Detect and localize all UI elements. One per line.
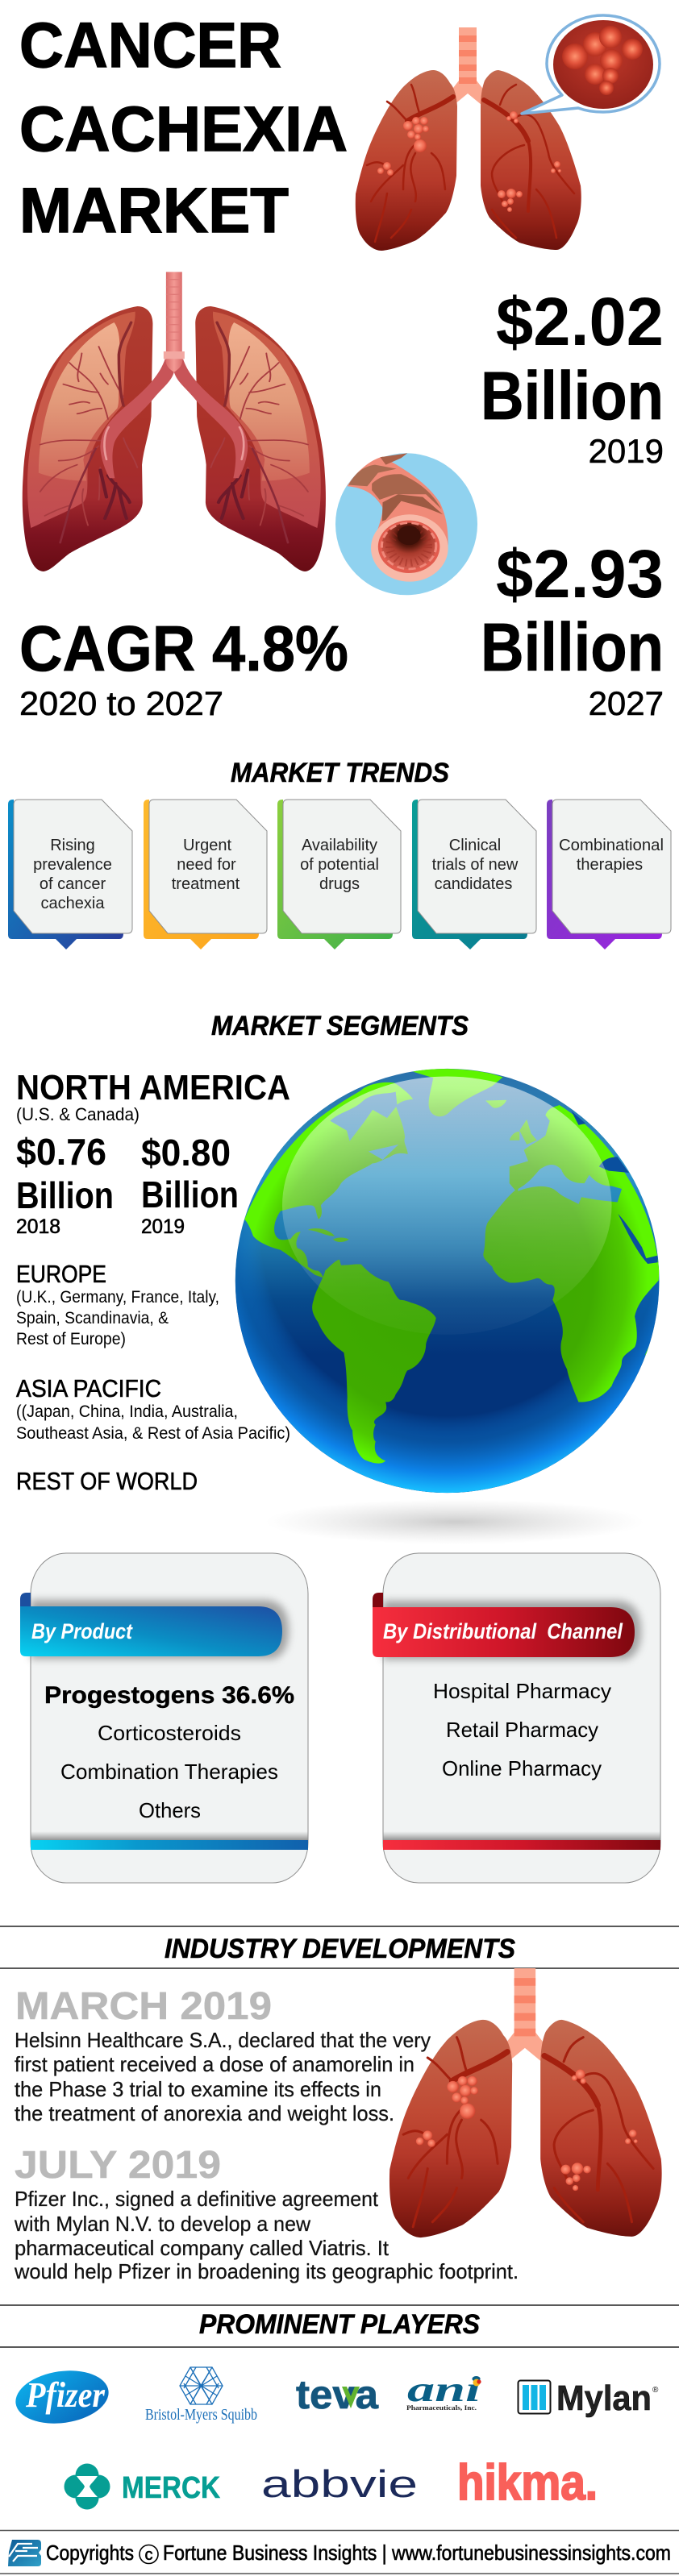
stat: 2019 market size (481, 284, 664, 470)
panel: by distributional channel: Online Pharmacy (442, 1756, 602, 1780)
text block: March 2019 (15, 1985, 431, 2125)
icon: healthy lungs (23, 272, 326, 571)
text block: March 2019: MARCH 2019 (15, 1985, 272, 2028)
stat: 2019 market size: $2.02 (496, 284, 664, 359)
stat: CAGR (19, 613, 348, 722)
stat: 2019 value: Billion (141, 1174, 239, 1215)
stat: 2019 value: $0.80 (141, 1132, 231, 1174)
stat: 2019 value: 2019 (141, 1215, 185, 1238)
stat: 2018 value: Billion (16, 1174, 114, 1216)
ribbon: by distributional channel: By Distributional Channel (383, 1619, 623, 1643)
text block: July 2019: would help Pfizer in broadening its geographic footprint. (14, 2259, 519, 2283)
card: availability: drugs (319, 875, 360, 893)
text block: March 2019: Helsinn Healthcare S.A., declared that the very (15, 2028, 431, 2052)
panel: by distributional channel (373, 1553, 660, 1883)
logo: Merck: MERCK (122, 2471, 220, 2505)
heading: market segments: MARKET SEGMENTS (211, 1011, 469, 1041)
logo: Pfizer (12, 2365, 112, 2429)
logo: Mylan: Mylan (556, 2379, 652, 2418)
panel: by product: Combination Therapies (60, 1760, 278, 1784)
text: Europe: (U.K., Germany, France, Italy, (16, 1288, 219, 1307)
stat: CAGR: 2020 to 2027 (19, 684, 223, 722)
heading: prominent players: PROMINENT PLAYERS (199, 2309, 480, 2340)
panel: market trends cards (8, 800, 671, 949)
heading: market trends: MARKET TRENDS (231, 758, 449, 788)
text: North America (16, 1068, 290, 1238)
logo: Bristol-Myers Squibb: Bristol-Myers Squibb (145, 2406, 257, 2424)
card: clinical trials (412, 800, 536, 949)
icon: Fortune Business Insights (8, 2540, 41, 2566)
text: Europe: Spain, Scandinavia, & (16, 1309, 169, 1327)
stat: 2018 value: 2018 (16, 1215, 60, 1238)
stat: 2019 market size: 2019 (589, 432, 664, 470)
logo: ani: ani (407, 2370, 481, 2409)
text: Asia Pacific: ASIA PACIFIC (16, 1374, 161, 1402)
panel: by distributional channel: Retail Pharmacy (446, 1718, 598, 1742)
icon: airway cross-section (335, 453, 477, 595)
panel: by product: Progestogens 36.6% (44, 1682, 294, 1709)
card: clinical trials: candidates (435, 875, 512, 893)
stat: 2027 market size: 2027 (589, 684, 664, 722)
card: rising prevalence: cachexia (41, 895, 105, 912)
callout: tumour close-up bubble (522, 15, 660, 114)
card: combinational therapies (547, 800, 671, 949)
stat: 2018 value (16, 1131, 114, 1238)
stat: 2027 market size (481, 536, 664, 722)
text block: March 2019: the treatment of anorexia and weight loss. (15, 2101, 394, 2125)
logo: Merck (65, 2463, 220, 2510)
panel: by product: Others (139, 1798, 201, 1822)
card: urgent need: Urgent (183, 837, 231, 854)
footer: copyright: Copyrights (46, 2541, 134, 2565)
logo: Bristol-Myers Squibb (145, 2367, 257, 2424)
icon: lungs with tumours (356, 27, 581, 251)
footer: copyright (8, 2540, 671, 2566)
stat: 2018 value: $0.76 (16, 1131, 106, 1173)
card: clinical trials: Clinical (449, 837, 501, 854)
title: CANCER (19, 9, 281, 81)
text: Asia Pacific: ((Japan, China, India, Australia, (16, 1402, 238, 1421)
logo: AbbVie: abbvie (261, 2462, 418, 2505)
card: urgent need (144, 800, 267, 949)
card: combinational therapies: therapies (577, 856, 643, 874)
card: rising prevalence: Rising (50, 837, 95, 854)
stat: CAGR: CAGR 4.8% (19, 613, 348, 684)
shadow under globe (265, 1499, 644, 1544)
logo: Mylan: ® (652, 2386, 659, 2395)
stat: 2019 value (141, 1132, 239, 1238)
title (19, 9, 348, 246)
card: availability: of potential (300, 856, 379, 874)
card: rising prevalence: prevalence (33, 856, 112, 874)
logo: teva: teva (296, 2372, 379, 2417)
panel: by distributional channel: Hospital Pharmacy (433, 1679, 611, 1703)
text: Asia Pacific (16, 1374, 290, 1443)
text: Europe (16, 1260, 219, 1348)
card: availability: Availability (302, 837, 377, 854)
icon: globe (235, 1069, 659, 1493)
title: CACHEXIA (19, 93, 348, 164)
text: Europe: Rest of Europe) (16, 1330, 126, 1348)
text block: March 2019: the Phase 3 trial to examine its effects in (15, 2077, 381, 2101)
text: Rest of World: REST OF WORLD (16, 1467, 198, 1495)
text: Asia Pacific: Southeast Asia, & Rest of Asia Pacific) (16, 1424, 290, 1443)
text block: July 2019: with Mylan N.V. to develop a new (14, 2212, 310, 2236)
text block: March 2019: first patient received a dose of anamorelin in (15, 2052, 414, 2076)
card: combinational therapies: Combinational (559, 837, 664, 854)
text block: July 2019: JULY 2019 (15, 2144, 221, 2187)
footer: copyright: c (145, 2546, 153, 2564)
card: availability (277, 800, 401, 949)
panel: by product (20, 1553, 308, 1883)
card: clinical trials: trials of new (432, 856, 519, 874)
text block: July 2019: pharmaceutical company called Viatris. It (15, 2236, 389, 2260)
logo: Hikma: hikma. (457, 2455, 598, 2511)
ribbon: by product: By Product (31, 1619, 133, 1643)
panel: by product: Corticosteroids (98, 1721, 241, 1745)
logo: ani (406, 2370, 481, 2412)
card: urgent need: need for (177, 856, 236, 874)
heading: industry developments: INDUSTRY DEVELOPMENTS (165, 1934, 515, 1964)
card: urgent need: treatment (172, 875, 240, 893)
stat: 2027 market size: $2.93 (496, 536, 664, 612)
logo: Pfizer: Pfizer (25, 2375, 106, 2415)
title: MARKET (19, 174, 289, 246)
icon: lungs with tumours (developments) (389, 1968, 662, 2237)
card: rising prevalence: of cancer (40, 875, 106, 893)
logo: ani: Pharmaceuticals, Inc. (406, 2404, 477, 2412)
ribbon: by distributional channel (373, 1593, 635, 1657)
card: rising prevalence (8, 800, 132, 949)
text: Europe: EUROPE (16, 1260, 106, 1288)
ribbon: by product (20, 1593, 282, 1656)
text: North America: (U.S. & Canada) (16, 1104, 140, 1124)
text block: July 2019 (14, 2144, 519, 2283)
text: North America: NORTH AMERICA (16, 1068, 290, 1107)
text block: July 2019: Pfizer Inc., signed a definitive agreement (15, 2187, 379, 2211)
